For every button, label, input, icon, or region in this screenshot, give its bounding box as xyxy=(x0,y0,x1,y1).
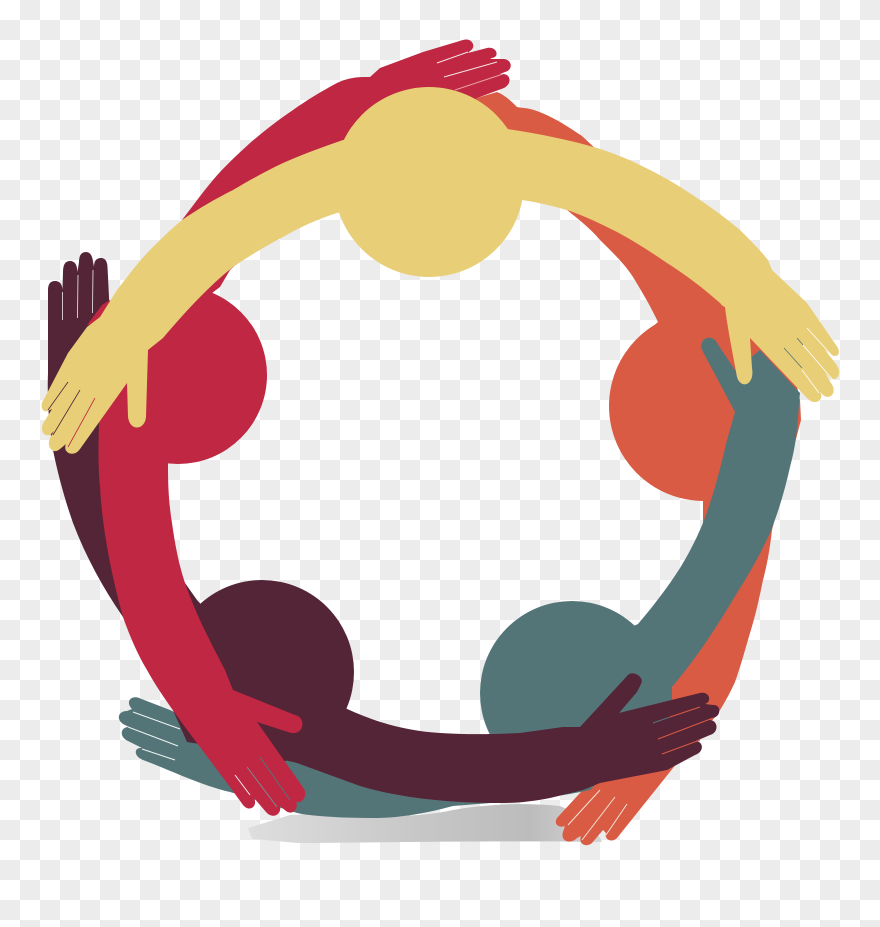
figure: red xyxy=(87,39,511,816)
red sliver beside yellow arm xyxy=(87,300,120,325)
yellow head xyxy=(334,87,524,277)
teal finger lines xyxy=(128,712,180,760)
maroon finger lines xyxy=(653,707,713,754)
teal raised arm and hand xyxy=(500,338,800,790)
red finger lines xyxy=(235,52,503,807)
figure: orange xyxy=(470,92,801,845)
maroon hand gaps xyxy=(62,270,93,320)
red head xyxy=(89,286,267,464)
ground shadow xyxy=(248,804,602,843)
red lower arm and hand xyxy=(98,380,305,816)
maroon arms and hands xyxy=(48,252,719,803)
yellow finger lines xyxy=(48,328,836,447)
teal lower arm and hand xyxy=(119,697,600,818)
yellow arms and hands xyxy=(42,129,839,454)
orange finger lines xyxy=(568,790,627,840)
figure: maroon xyxy=(48,252,719,803)
orange head xyxy=(609,311,799,501)
figure: yellow xyxy=(42,87,839,454)
red upper arm and hand xyxy=(140,39,511,340)
figure: teal xyxy=(119,338,800,818)
maroon head xyxy=(170,580,354,764)
teal head xyxy=(480,601,664,785)
orange arms and hand xyxy=(470,92,801,845)
